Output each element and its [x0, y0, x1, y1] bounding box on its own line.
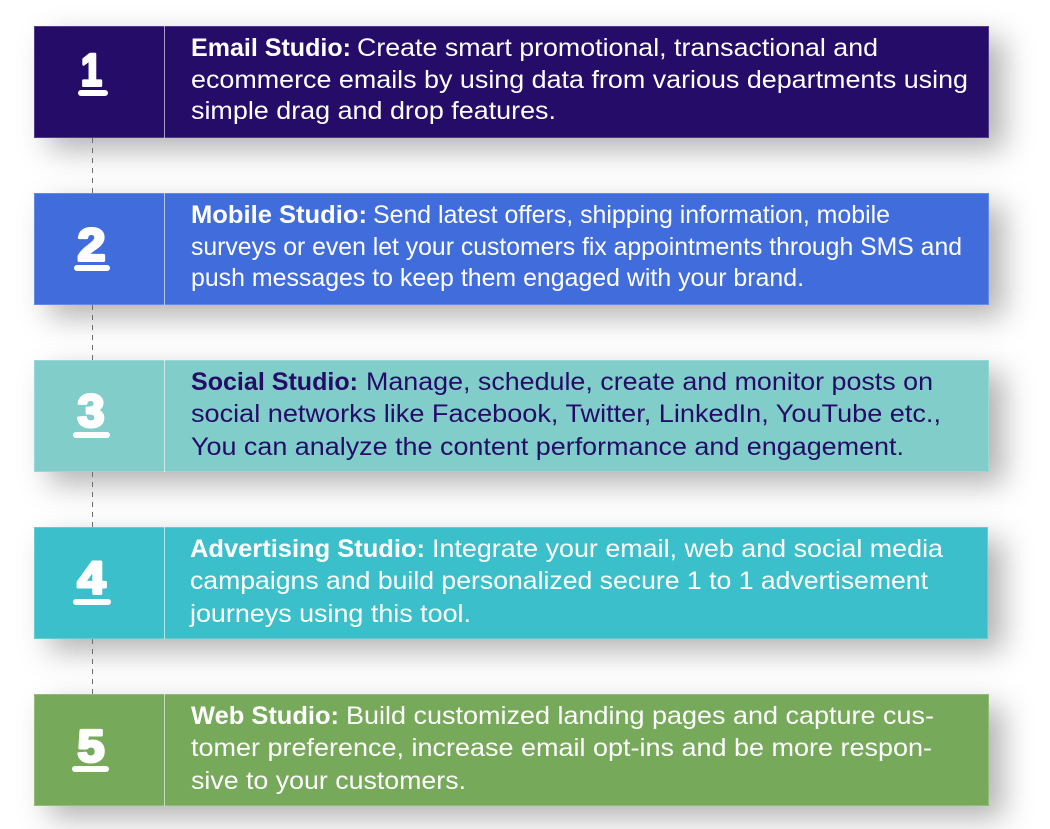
text: Advertising Studio: campaigns and build personalized secure 1 to 1 advertisement — [190, 567, 928, 595]
number 3: 3 — [78, 386, 104, 436]
text: Advertising Studio — [189, 535, 943, 628]
text: Email Studio — [191, 34, 968, 125]
text: Social Studio — [191, 368, 941, 461]
text: Email Studio: ecommerce emails by using data from various departments using — [191, 66, 968, 94]
dashed connectors — [92, 138, 94, 694]
panel: Email Studio — [34, 26, 1004, 150]
text: Mobile Studio: Mobile Studio: — [191, 201, 367, 229]
number 3 — [73, 386, 110, 438]
text: Social Studio: You can analyze the content performance and engagement. — [191, 433, 904, 461]
panel: Advertising Studio — [34, 527, 1003, 651]
number 2: 2 — [78, 220, 106, 270]
text: Email Studio: Email Studio: — [191, 34, 351, 62]
text: Web Studio: tomer preference, increase email opt-ins and be more respon- — [191, 734, 932, 762]
panel: Social Studio — [34, 360, 1004, 484]
text: Advertising Studio: Integrate your email, web and social media — [432, 535, 943, 563]
text: Email Studio: simple drag and drop features. — [191, 97, 556, 125]
text: Web Studio: Build customized landing pages and capture cus- — [346, 702, 934, 730]
text: Social Studio: social networks like Facebook, Twitter, LinkedIn, YouTube etc., — [191, 400, 941, 428]
text: Advertising Studio: Advertising Studio: — [190, 535, 425, 563]
number 5 — [72, 720, 109, 772]
number 5: 5 — [78, 720, 104, 772]
text: Web Studio: Web Studio: — [191, 702, 339, 730]
text: Mobile Studio — [191, 201, 962, 292]
text: Mobile Studio: push messages to keep them engaged with your brand. — [191, 264, 804, 292]
number 4 — [73, 552, 111, 605]
number 2 — [74, 220, 110, 271]
number 1: 1 — [81, 44, 102, 96]
text: Advertising Studio: journeys using this tool. — [189, 600, 471, 628]
text: Mobile Studio: Send latest offers, shipping information, mobile — [373, 201, 890, 229]
panel: Mobile Studio — [34, 193, 1004, 317]
number 4: 4 — [78, 552, 106, 604]
text: Social Studio: Social Studio: — [191, 368, 358, 396]
text: Web Studio — [191, 702, 934, 795]
text: Mobile Studio: surveys or even let your customers fix appointments through SMS and — [191, 233, 962, 261]
text: Email Studio: Create smart promotional, transactional and — [357, 34, 878, 62]
panel: Web Studio — [34, 694, 1003, 818]
text: Social Studio: Manage, schedule, create and monitor posts on — [366, 368, 933, 396]
text: Web Studio: sive to your customers. — [191, 767, 466, 795]
